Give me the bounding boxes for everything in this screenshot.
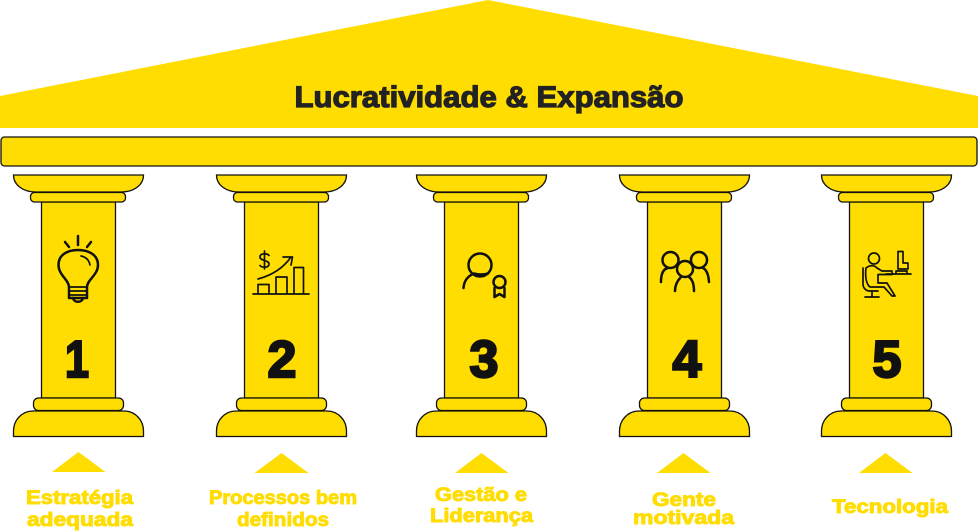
pillar 3	[416, 175, 546, 436]
icon: person with award ribbon	[464, 254, 506, 297]
pillar 5 base	[822, 411, 952, 436]
label: Estratégia adequada: Estratégia	[26, 488, 134, 509]
triangle marker 3	[455, 453, 508, 473]
triangle marker 4	[657, 453, 710, 473]
label: Gestão e Liderança: Liderança	[430, 506, 533, 527]
pillar 4 upper collar	[636, 192, 732, 202]
icon: group of three people	[661, 252, 709, 291]
label: Gente motivada: motivada	[633, 508, 735, 529]
pillar 2 upper collar	[234, 192, 328, 202]
pillar 1 lower collar	[34, 398, 124, 410]
number 5: 5	[873, 331, 901, 389]
pillar 2 lower collar	[236, 398, 326, 410]
triangle marker 1	[52, 452, 106, 472]
pillar 5 capital	[822, 175, 952, 192]
pillar 2 shaft	[244, 202, 318, 398]
label group 1: triangle and text	[26, 452, 134, 531]
pillar 2	[216, 175, 346, 436]
entablature beam	[1, 137, 977, 166]
label: Processos bem definidos: definidos	[237, 510, 329, 531]
pillar 1 capital	[14, 175, 144, 192]
number 4: 4	[673, 331, 702, 389]
pillar 3 upper collar	[434, 192, 528, 202]
pillar 3 base	[416, 411, 546, 436]
pillar 4	[620, 175, 750, 436]
pillar 5 shaft	[850, 202, 924, 398]
pillar 5 lower collar	[842, 398, 932, 410]
icon: light bulb	[58, 236, 98, 302]
label group 2: triangle and text	[209, 453, 357, 531]
label: Tecnologia: Tecnologia	[832, 497, 948, 518]
pillar 1 shaft	[42, 202, 116, 398]
pillar 4 capital	[620, 175, 750, 192]
number 3: 3	[470, 331, 498, 389]
pillar 3 shaft	[444, 202, 518, 398]
pillar 4 shaft	[648, 202, 722, 398]
icon: person working at desk	[863, 252, 911, 297]
number 1: 1	[65, 331, 89, 389]
pillar 5 upper collar	[838, 192, 934, 202]
label group 3: triangle and text	[430, 453, 533, 527]
triangle marker 5	[859, 453, 912, 473]
number 2: 2	[268, 331, 296, 389]
pillar 3 capital	[416, 175, 546, 192]
title: Lucratividade & Expansão	[294, 81, 684, 114]
pillar 4 base	[620, 411, 750, 436]
triangle marker 2	[254, 453, 308, 473]
roof pediment	[0, 0, 978, 128]
pillar 3 lower collar	[436, 398, 526, 410]
pillar 5	[822, 175, 952, 436]
icon: growth chart with dollar sign	[253, 251, 309, 294]
pillar 1	[14, 175, 144, 436]
label group 4: triangle and text	[633, 453, 735, 529]
label: Gestão e Liderança: Gestão e	[435, 485, 527, 506]
label: Processos bem definidos: Processos bem	[209, 488, 357, 509]
label: Gente motivada: Gente	[652, 490, 716, 511]
pillar 1 base	[14, 411, 144, 436]
pillar 2 capital	[216, 175, 346, 192]
label group 5: triangle and text	[832, 453, 948, 518]
label: Estratégia adequada: adequada	[27, 510, 134, 531]
pillar 2 base	[216, 411, 346, 436]
pillar 4 lower collar	[640, 398, 730, 410]
pillar 1 upper collar	[30, 192, 126, 202]
